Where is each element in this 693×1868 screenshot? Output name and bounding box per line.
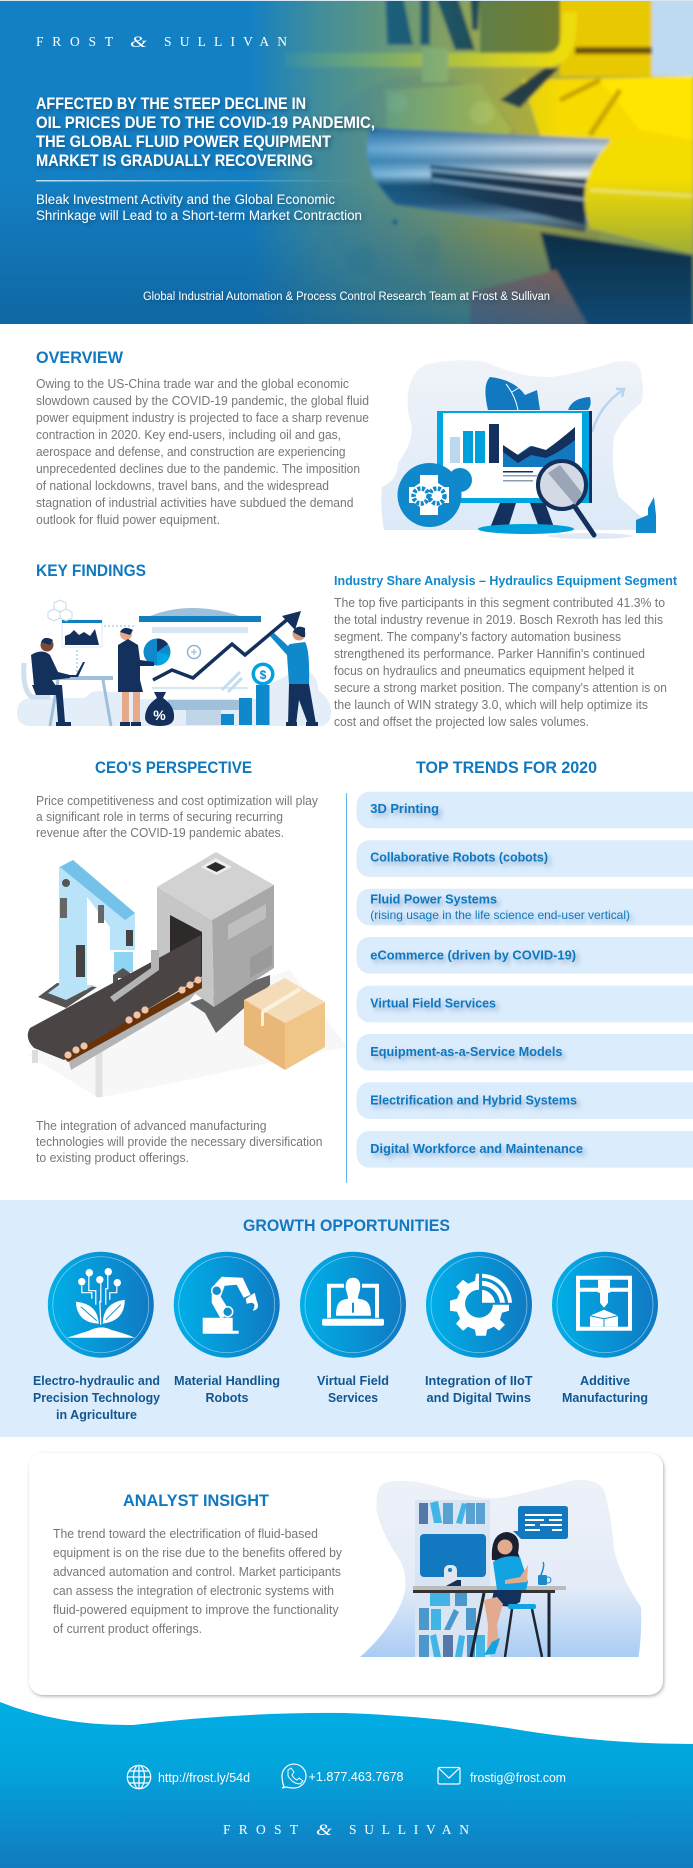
icon: magnifying glass [538, 461, 594, 535]
title: OIL PRICES DUE TO THE COVID-19 PANDEMIC, [36, 114, 375, 132]
heading: CEO's perspective: CEO'S PERSPECTIVE [95, 758, 252, 777]
text block: analyst insight [53, 1527, 343, 1636]
trend: electrification [357, 1082, 693, 1119]
text block: key findings: strengthened its performance. Parker Hannifin's continued [334, 647, 645, 661]
text block: overview: aerospace and defense, and construction are experiencing [36, 445, 346, 459]
trend: collaborative robots [357, 840, 693, 877]
text block: key findings: cost and offset the projected low sales volumes. [334, 715, 589, 729]
contact: email: frostig@frost.com [470, 1770, 566, 1785]
text block: analyst insight: of current product offerings. [53, 1622, 202, 1636]
illustration: team analysing growth chart [17, 600, 331, 726]
text block: overview: slowdown caused by the COVID-19 pandemic, the global fluid [36, 394, 369, 408]
trend: equipment-as-a-service [357, 1034, 693, 1071]
label: material handling [174, 1374, 280, 1405]
text block: key findings: the launch of WIN strategy 3.0, which will help optimize its [334, 698, 648, 712]
icon: 3D printer [552, 1252, 658, 1358]
text block: overview: stagnation of industrial activities have subdued the demand [36, 496, 354, 510]
text block: key findings: focus on hydraulics and pneumatics equipment helped it [334, 664, 634, 678]
icon: gear with signal [426, 1252, 532, 1358]
logo: footer Frost & Sullivan [223, 1822, 469, 1839]
text block: overview: contraction in 2020. Key end-users, including oil and gas, [36, 428, 341, 442]
label: electro-hydraulic [33, 1374, 160, 1422]
label: additive manufacturing [562, 1374, 648, 1405]
trend: virtual field services [357, 986, 693, 1022]
text block: CEO statement one: revenue after the COVID-19 pandemic abates. [36, 826, 284, 840]
illustration: team analysing growth chart: $ [260, 668, 267, 682]
footer wave background [0, 1702, 693, 1868]
trend: fluid power systems [357, 889, 693, 925]
text block: overview: of national lockdowns, travel bans, and the widespread [36, 479, 329, 493]
logo: Frost & Sullivan [36, 36, 287, 47]
heading: key findings: KEY FINDINGS [36, 561, 146, 580]
person raising arrow [270, 627, 318, 726]
text block: overview: Owing to the US-China trade war and the global economic [36, 377, 349, 391]
icon: money bag: % [153, 707, 166, 723]
subtitle: Bleak Investment Activity and the Global Economic [36, 192, 335, 207]
text block: analyst insight: advanced automation and control. Market participants [53, 1565, 341, 1579]
text block: overview [36, 377, 369, 527]
text block: key findings: secure a strong market position. The company's attention is on [334, 681, 667, 695]
panel: overview [36, 348, 656, 539]
title: THE GLOBAL FLUID POWER EQUIPMENT [36, 133, 331, 151]
conveyor belt [28, 935, 202, 1097]
trend: electrification: Electrification and Hybrid Systems [370, 1094, 577, 1108]
contact: phone [282, 1764, 404, 1788]
trend: digital workforce [357, 1131, 693, 1168]
yellow cylinder [584, 139, 693, 254]
text block: CEO statement two: The integration of advanced manufacturing [36, 1119, 267, 1133]
text block: key findings: The top five participants in this segment contributed 41.3% to [334, 596, 665, 610]
panel: hero banner [0, 0, 693, 330]
text block: overview: outlook for fluid power equipment. [36, 513, 220, 527]
text block: CEO statement one: a significant role in terms of securing recurring [36, 810, 283, 824]
processing machine [157, 852, 274, 1033]
text block: overview: power equipment industry is projected to face a sharp revenue [36, 411, 369, 425]
label: material handling: Robots [206, 1391, 249, 1405]
title: AFFECTED BY THE STEEP DECLINE IN [36, 95, 306, 113]
label: IIoT: and Digital Twins [426, 1391, 531, 1405]
illustration: factory robot arm, conveyor and parcel [28, 852, 347, 1098]
speech bubble [513, 1506, 568, 1539]
text block: key findings: segment. The company's factory automation business [334, 630, 621, 644]
photo: hydraulic cylinder machinery [230, 0, 693, 330]
trend: 3D printing: 3D Printing [370, 802, 439, 816]
title: MARKET IS GRADUALLY RECOVERING [36, 152, 313, 170]
text block: analyst insight: fluid-powered equipment to improve the functionality [53, 1603, 339, 1617]
contact: website: http://frost.ly/54d [158, 1770, 250, 1785]
logo: footer Frost & Sullivan: & [316, 1822, 333, 1839]
trend: 3D printing [357, 792, 693, 828]
label: IIoT: Integration of IIoT [425, 1374, 533, 1388]
trend: virtual field services: Virtual Field Services [370, 997, 496, 1011]
icon: gear badge [398, 463, 462, 527]
illustration: monitor with charts, gear badge and magnifier [381, 360, 656, 539]
chrome rod [367, 128, 610, 232]
pipe [285, 12, 570, 60]
person with pie chart [118, 628, 154, 726]
text block: key findings [334, 596, 667, 729]
person seated at desk [24, 638, 113, 726]
label: additive manufacturing: Manufacturing [562, 1391, 648, 1405]
label: additive manufacturing: Additive [580, 1374, 630, 1388]
line chart arrow [153, 611, 301, 680]
text block: analyst insight: The trend toward the electrification of fluid-based [53, 1527, 318, 1541]
subtitle: Shrinkage will Lead to a Short-term Market Contraction [36, 208, 362, 223]
panel: key findings [17, 561, 678, 729]
icon: money bag [145, 692, 174, 726]
yellow body [522, 76, 693, 150]
icon: laptop with person [300, 1252, 406, 1358]
label: electro-hydraulic: Electro-hydraulic and [33, 1374, 160, 1388]
heading: growth opportunities: GROWTH OPPORTUNITIES [243, 1216, 450, 1235]
text block: overview: unprecedented declines due to the pandemic. The imposition [36, 462, 360, 476]
label: virtual field: Services [328, 1391, 378, 1405]
trend: collaborative robots: Collaborative Robots (cobots) [370, 850, 548, 864]
coffee mug [538, 1562, 551, 1585]
logo: Frost & Sullivan: SULLIVAN [164, 34, 287, 49]
small chart window [62, 620, 102, 647]
panel: footer contact details [127, 1764, 566, 1839]
contact: website [127, 1765, 250, 1789]
text block: analyst insight: can assess the integration of electronic systems with [53, 1584, 334, 1598]
label: electro-hydraulic: Precision Technology [33, 1391, 160, 1405]
label: virtual field [317, 1374, 389, 1405]
label: material handling: Material Handling [174, 1374, 280, 1388]
text block: analyst insight: equipment is on the rise due to the benefits offered by [53, 1546, 343, 1560]
flange plate [410, 78, 518, 226]
icon: robot arm [174, 1252, 280, 1358]
trend: fluid power systems: (rising usage in the life science end-user vertical) [370, 908, 630, 922]
robot arm [38, 860, 135, 1008]
text block: key findings: the total industry revenue in 2019. Bosch Rexroth has led this [334, 613, 663, 627]
text block: CEO statement one: Price competitiveness and cost optimization will play [36, 794, 319, 808]
illustration: woman at computer desk [360, 1480, 641, 1657]
lower body [442, 228, 598, 266]
heading: top trends: TOP TRENDS FOR 2020 [416, 758, 597, 777]
subtitle [36, 192, 362, 223]
contact: phone: +1.877.463.7678 [308, 1769, 404, 1784]
trend: fluid power systems: Fluid Power Systems [370, 892, 497, 906]
text block: CEO statement one [36, 794, 319, 840]
logo: Frost & Sullivan: FROST [36, 34, 114, 49]
trend: equipment-as-a-service: Equipment-as-a-Service Models [370, 1045, 563, 1059]
logo: Frost & Sullivan: & [130, 34, 148, 51]
heading: analyst insight: ANALYST INSIGHT [123, 1491, 270, 1510]
computer monitor [420, 1534, 486, 1586]
contact: email [438, 1768, 566, 1785]
desk [413, 1586, 566, 1657]
trend: digital workforce: Digital Workforce and Maintenance [370, 1142, 583, 1156]
subheading: industry share analysis: Industry Share Analysis – Hydraulics Equipment Segment [334, 574, 678, 588]
heading: overview: OVERVIEW [36, 348, 124, 367]
text block: CEO statement two [36, 1119, 323, 1165]
parcel box [244, 978, 325, 1070]
panel: growth opportunities [0, 1200, 693, 1437]
bookshelf [415, 1500, 490, 1657]
logo: footer Frost & Sullivan: SULLIVAN [349, 1822, 469, 1837]
attribution: Global Industrial Automation & Process Control Research Team at Frost & Sullivan [143, 291, 550, 303]
label: IIoT [425, 1374, 533, 1405]
trend: eCommerce: eCommerce (driven by COVID-19) [370, 948, 576, 962]
icon: agriculture plant [48, 1252, 154, 1358]
panel: analyst insight [29, 1453, 663, 1695]
woman with headset [484, 1532, 542, 1657]
text block: CEO statement two: technologies will provide the necessary diversification [36, 1135, 323, 1149]
text block: CEO statement two: to existing product offerings. [36, 1151, 189, 1165]
trend: eCommerce [357, 937, 693, 974]
title [36, 95, 375, 170]
label: virtual field: Virtual Field [317, 1374, 389, 1388]
logo: footer Frost & Sullivan: FROST [223, 1822, 299, 1837]
panel: top trends for 2020 [357, 758, 693, 1168]
panel: CEO's perspective [28, 758, 347, 1165]
label: electro-hydraulic: in Agriculture [56, 1408, 137, 1422]
